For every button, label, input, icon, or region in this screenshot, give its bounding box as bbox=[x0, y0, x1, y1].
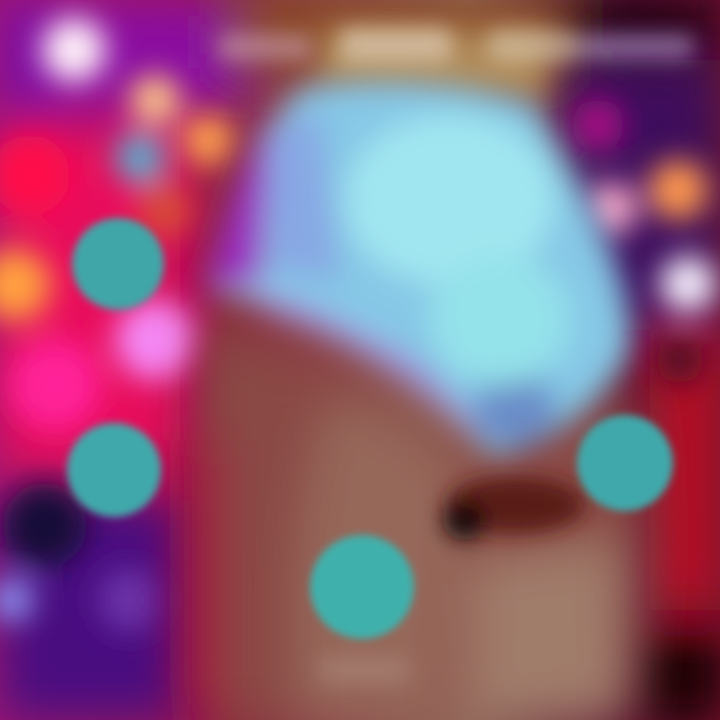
central figure, dark shadow bbox=[443, 477, 585, 540]
heading, illegible blurred text bbox=[218, 28, 694, 62]
marker: bottom centre bbox=[310, 535, 414, 639]
marker: lower left bbox=[67, 423, 161, 517]
central figure, blue garment bbox=[205, 81, 630, 455]
marker: upper left bbox=[72, 218, 164, 310]
central figure, waist tone bbox=[320, 30, 550, 100]
marker: right bbox=[577, 415, 673, 511]
central figure, lower tone bbox=[180, 320, 646, 720]
lower label, illegible blurred text bbox=[318, 658, 410, 682]
